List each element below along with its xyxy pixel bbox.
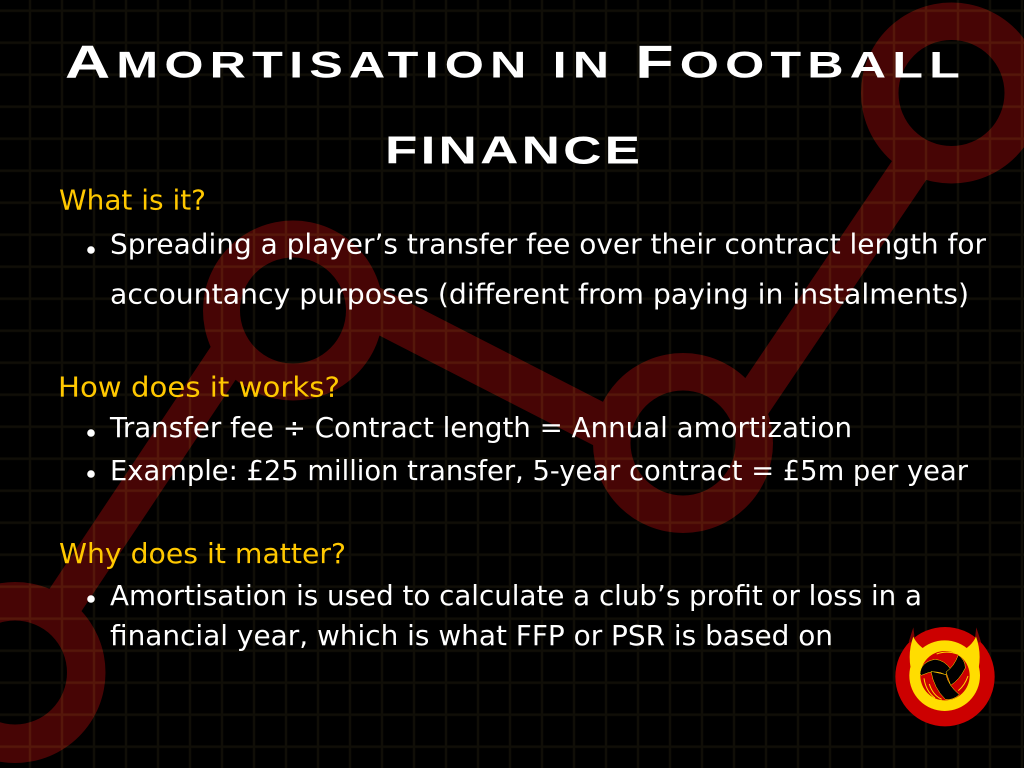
section: how does it works: How does it works? bbox=[58, 370, 340, 404]
section: how does it works: Example: £25 million transfer, 5-year contract = £5m per year bbox=[110, 454, 968, 487]
section: what is it: Spreading a player’s transfer fee over their contract length for bbox=[110, 228, 986, 260]
section: what is it: What is it? bbox=[59, 184, 206, 216]
section: why does it matter bbox=[59, 537, 922, 652]
section: why does it matter: Amortisation is used to calculate a club’s profit or loss in a bbox=[110, 579, 922, 612]
section: why does it matter: financial year, which is what FFP or PSR is based on bbox=[110, 619, 833, 652]
section: how does it works: Transfer fee ÷ Contract length = Annual amortization bbox=[109, 411, 852, 444]
title: AMORTISATION IN FOOTBALL bbox=[65, 36, 960, 88]
section: why does it matter: Why does it matter? bbox=[59, 537, 346, 570]
section: what is it bbox=[59, 184, 986, 310]
title: FINANCE bbox=[385, 128, 640, 172]
section: what is it: accountancy purposes (different from paying in instalments) bbox=[110, 278, 969, 310]
title bbox=[65, 36, 960, 172]
icon: club logo bbox=[895, 627, 995, 726]
section: how does it works bbox=[58, 370, 968, 487]
